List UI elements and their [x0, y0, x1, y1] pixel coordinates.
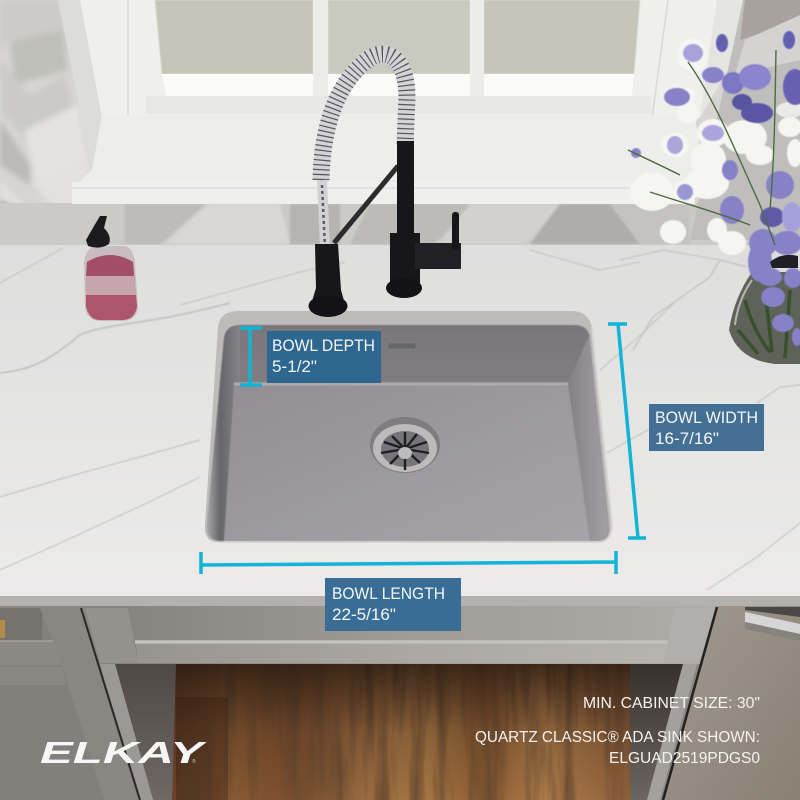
dimension: bowl depth: 5-1/2": [272, 358, 317, 376]
dimension: bowl length: BOWL LENGTH: [332, 585, 445, 603]
sink badge: [388, 343, 416, 349]
faucet: [308, 54, 461, 317]
right marble: [690, 0, 800, 240]
casing: [80, 0, 717, 118]
left tile sliver: [58, 0, 102, 170]
left knob: [0, 620, 5, 638]
white bells: [630, 38, 800, 255]
window panes: [155, 0, 640, 96]
dimension: bowl length: [201, 551, 616, 631]
sink: [205, 311, 612, 542]
dimension: bowl depth: BOWL DEPTH: [272, 337, 375, 355]
cabinet interior right side: [630, 664, 686, 800]
drain: [370, 417, 440, 473]
floor: [172, 663, 634, 800]
soap bottle: [84, 216, 138, 321]
cabinet handle: [745, 607, 800, 641]
sink cabinet front: [84, 606, 718, 664]
dimension: bowl length: 22-5/16": [332, 606, 396, 624]
faucet handle: [415, 243, 461, 269]
flower stems: [628, 50, 776, 245]
dimension: bowl width: 16-7/16": [655, 430, 719, 448]
left bowl wall: [207, 325, 240, 541]
text: cabinet size and model: QUARTZ CLASSIC® ADA SINK SHOWN:: [475, 729, 760, 746]
cabinet interior left side: [115, 664, 176, 800]
bottle pump: [86, 216, 110, 248]
logo: Elkay: ®: [192, 758, 196, 765]
faucet support arm: [334, 166, 398, 243]
window sill: [72, 115, 705, 204]
sink rim: [205, 311, 612, 542]
bowl floor edge: [234, 382, 568, 386]
cabinet: [0, 606, 800, 800]
countertop: [0, 245, 800, 608]
marble veins: [0, 248, 800, 590]
dimension: bowl depth: [240, 328, 381, 385]
bowl floor: [224, 385, 590, 541]
text: cabinet size and model: MIN. CABINET SIZE: 30": [583, 695, 760, 712]
right bowl wall: [568, 334, 608, 541]
purple bells: [631, 31, 800, 346]
logo: Elkay: [40, 735, 208, 770]
vase: [729, 272, 800, 364]
bottle liquid: [86, 255, 137, 320]
faucet hose: [322, 180, 325, 248]
left cabinet: [0, 608, 140, 800]
faucet sprayer base: [310, 244, 346, 308]
text: cabinet size and model: [475, 695, 760, 767]
faucet body: [397, 141, 414, 238]
background: marble wall: [0, 0, 800, 250]
text: cabinet size and model: ELGUAD2519PDGS0: [609, 750, 760, 767]
dimension: bowl width: [608, 324, 764, 538]
backsplash band: [0, 203, 800, 246]
window: [58, 0, 800, 240]
bottle glass: [84, 246, 138, 321]
logo: Elkay: ELKAY: [40, 735, 208, 770]
cabinet stile under front: [100, 664, 153, 800]
right cabinet: [663, 606, 800, 800]
flowers: [628, 31, 800, 364]
faucet spring: [321, 54, 407, 180]
dimension: bowl width: BOWL WIDTH: [655, 409, 758, 427]
back wall: [207, 325, 609, 541]
